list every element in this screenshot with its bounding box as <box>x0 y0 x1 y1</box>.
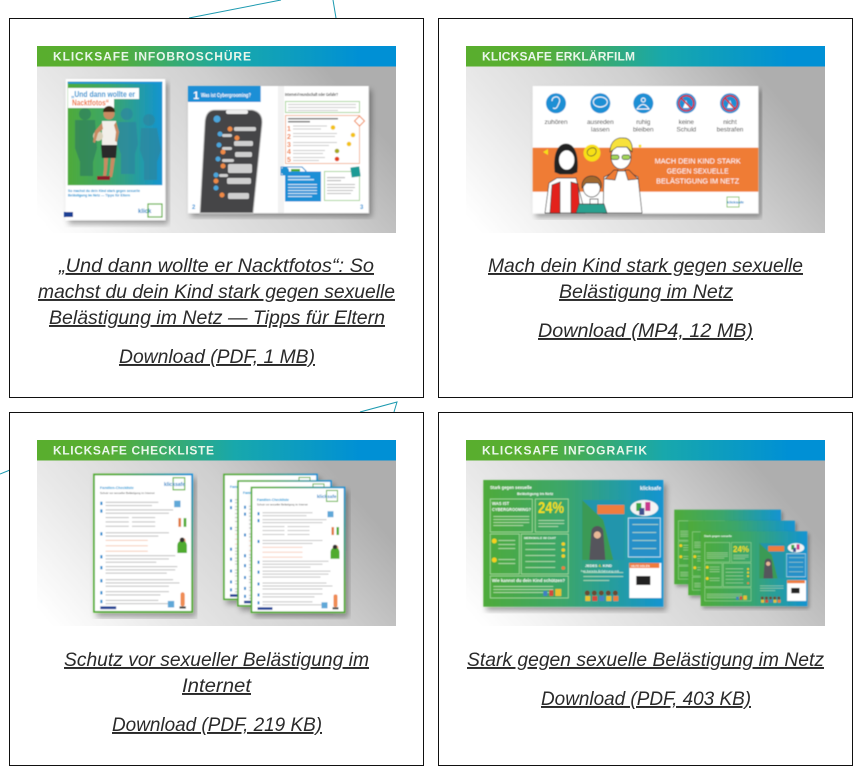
brochure spread: Was ist Cybergrooming? <box>201 93 251 99</box>
banner: Infografik: KLICKSAFE INFOGRAFIK <box>482 444 647 458</box>
brochure spread: Internet-Freundschaft oder Gefahr? <box>285 92 338 97</box>
caption: Checkliste <box>64 649 369 736</box>
icon labels: ruhig <box>636 119 651 126</box>
icon labels: zuhören <box>544 119 568 126</box>
image: Infobroschüre teaser <box>37 46 396 233</box>
brochure cover: So machst du dein Kind stark gegen sexuelle <box>68 189 140 193</box>
main infographic: HILFE HOLEN <box>631 564 650 568</box>
brochure spread: 1 <box>193 90 199 102</box>
brochure spread: 2 <box>287 134 291 141</box>
caption: Infografik: Download (PDF, 403 KB) <box>541 688 751 710</box>
main infographic: Wie kannst du dein Kind schützen? <box>492 578 565 583</box>
icon labels: keine <box>679 119 694 126</box>
icon row <box>546 93 740 113</box>
banner: Erklärfilm <box>466 46 825 66</box>
illustrated family <box>543 138 642 213</box>
background connector lines <box>0 0 397 474</box>
caption: Infobroschüre <box>38 255 395 368</box>
brochure cover: „Und dann wollte er <box>71 90 135 99</box>
phone <box>200 110 262 213</box>
brochure spread: 4 <box>287 149 291 156</box>
caption: Checkliste: Internet <box>182 675 253 697</box>
banner: Infografik <box>466 440 825 460</box>
main infographic: 24% <box>538 500 564 517</box>
icon labels: ausreden <box>587 119 614 126</box>
video still: klicksafe <box>727 200 745 204</box>
caption: Infografik: Stark gegen sexuelle Belästigung im Netz <box>467 649 824 671</box>
checklist sheet <box>94 474 192 612</box>
banner: Checkliste: KLICKSAFE CHECKLISTE <box>53 444 214 458</box>
stacked checklist sheets: Familien-Checkliste <box>230 485 262 489</box>
brochure spread: 1 <box>287 126 291 133</box>
brochure spread: 5 <box>287 157 291 164</box>
brochure cover: Nacktfotos“ <box>72 98 109 108</box>
caption: Erklärfilm <box>488 255 803 342</box>
stacked checklist sheets <box>224 474 344 612</box>
checklist sheet: Familien-Checkliste <box>100 486 134 490</box>
image: Checkliste teaser <box>37 440 396 626</box>
panel: Erklärfilm <box>438 18 852 398</box>
main infographic: Stark gegen sexuelle <box>490 485 532 490</box>
caption: Infobroschüre: Belästigung im Netz — Tipps für Eltern <box>49 307 385 329</box>
main infographic: Belästigung im Netz <box>517 492 553 496</box>
icon labels <box>544 119 744 134</box>
icon labels: nicht <box>723 119 737 126</box>
main infographic: CYBERGROOMING? <box>492 507 531 512</box>
brochure spread: 3 <box>287 142 291 149</box>
caption: Erklärfilm: Belästigung im Netz <box>559 281 733 303</box>
banner: Erklärfilm: KLICKSAFE ERKLÄRFILM <box>482 48 635 64</box>
panel: Checkliste <box>10 412 424 766</box>
video still <box>533 86 758 213</box>
small infographic copies: 24% <box>733 545 749 554</box>
stacked checklist sheets: Schutz vor sexueller Belästigung im Internet <box>257 502 308 506</box>
caption: Infobroschüre: „Und dann wollte er Nacktfotos“: So <box>58 255 374 277</box>
image: Infografik teaser <box>466 440 825 626</box>
main infographic: MERKMALE IM CHAT <box>524 536 556 540</box>
orange band headline <box>655 156 741 186</box>
stacked checklist sheets: Familien-Checkliste <box>257 498 289 502</box>
icon labels: bestrafen <box>717 126 744 134</box>
image: Erklärfilm teaser <box>466 46 825 233</box>
icon labels: Schuld <box>677 126 697 134</box>
main infographic: JEDES 4. KIND <box>585 564 612 568</box>
main infographic: WAS IST <box>492 501 510 506</box>
main infographic: hat bereits Erfahrung mit <box>581 569 619 573</box>
orange band headline: BELÄSTIGUNG IM NETZ <box>656 176 740 186</box>
small infographic copies: Stark gegen sexuelle <box>704 534 732 538</box>
brochure spread <box>188 86 369 213</box>
icon labels: bleiben <box>633 126 654 134</box>
caption: Infobroschüre: Download (PDF, 1 MB) <box>119 346 315 368</box>
banner: Infobroschüre <box>37 46 396 66</box>
brochure cover <box>64 79 165 220</box>
caption: Checkliste: Schutz vor sexueller Belästigung im <box>64 649 369 671</box>
main infographic: klicksafe <box>640 486 661 492</box>
orange band headline: MACH DEIN KIND STARK <box>655 156 741 166</box>
brochure spread: 2 <box>192 205 196 211</box>
stacked checklist sheets: klicksafe <box>317 494 337 499</box>
panel: Infobroschüre <box>10 18 424 398</box>
caption: Erklärfilm: Download (MP4, 12 MB) <box>538 320 753 342</box>
checklist sheet: Schutz vor sexueller Belästigung im Internet <box>100 491 155 495</box>
banner: Checkliste <box>37 440 396 460</box>
banner: Infobroschüre: KLICKSAFE INFOBROSCHÜRE <box>53 48 251 64</box>
caption: Erklärfilm: Mach dein Kind stark gegen sexuelle <box>488 255 803 277</box>
main infographic <box>483 480 663 607</box>
caption: Checkliste: Download (PDF, 219 KB) <box>112 714 322 736</box>
icon labels: lassen <box>591 126 610 134</box>
caption: Infografik <box>467 649 824 710</box>
panel: Infografik <box>438 412 852 766</box>
brochure cover: Belästigung im Netz — Tipps für Eltern <box>68 194 130 198</box>
orange band headline: GEGEN SEXUELLE <box>667 166 729 176</box>
small infographic copies <box>674 510 807 606</box>
caption: Infobroschüre: machst du dein Kind stark gegen sexuelle <box>38 281 395 303</box>
brochure spread: 3 <box>360 205 364 211</box>
brochure cover: klick <box>138 209 152 215</box>
checklist sheet: klicksafe <box>164 482 185 488</box>
stacked checklist sheets: Familien-Checkliste <box>243 491 275 495</box>
